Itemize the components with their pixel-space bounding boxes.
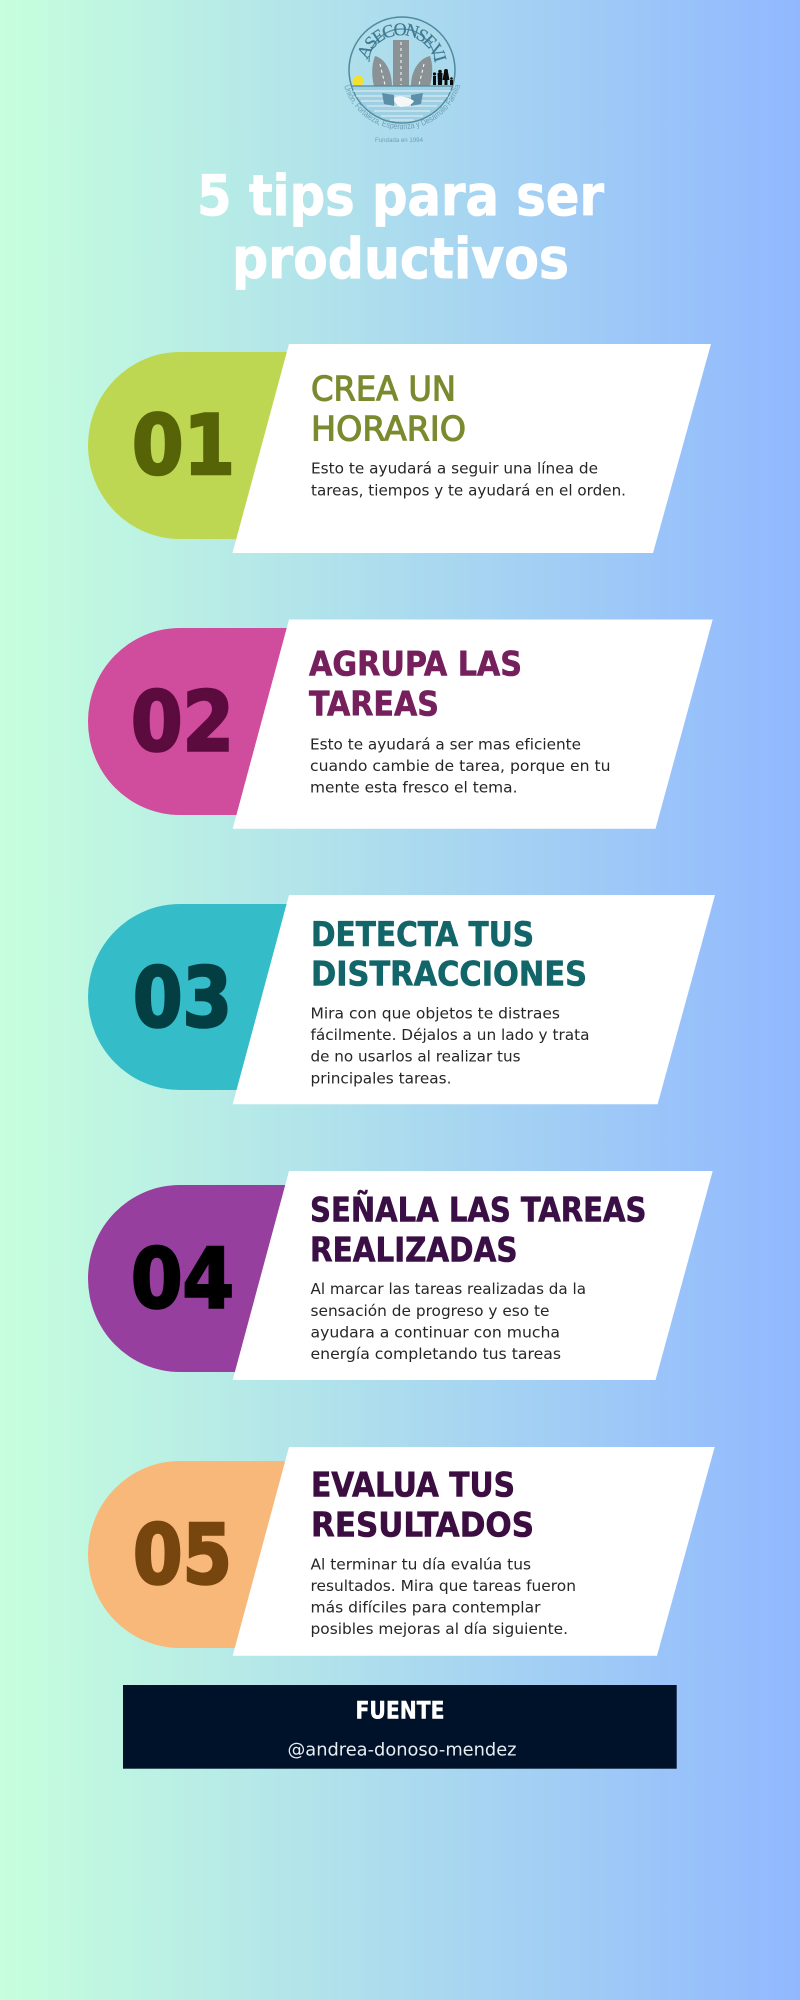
icon: family — [433, 69, 453, 85]
title: productivos — [232, 227, 569, 292]
heading 05: RESULTADOS — [311, 1505, 534, 1545]
number badge 05 — [88, 1461, 295, 1648]
body 02: mente esta fresco el tema. — [310, 778, 518, 796]
heading 03: DETECTA TUS — [311, 915, 534, 955]
heading 01: HORARIO — [311, 410, 466, 450]
number badge 04 — [88, 1185, 295, 1372]
logo: ASECONSEVI — [344, 16, 460, 144]
body 05: posibles mejoras al día siguiente. — [310, 1620, 568, 1638]
footer: fuente — [123, 1685, 677, 1769]
body 04: energía completando tus tareas — [310, 1345, 561, 1363]
heading 04: REALIZADAS — [310, 1230, 518, 1270]
heading 02: AGRUPA LAS — [309, 645, 522, 685]
body 05 — [310, 1555, 576, 1638]
card 02 — [233, 620, 713, 829]
heading 01: CREA UN — [311, 370, 456, 410]
number badge 02: 02 — [131, 674, 234, 771]
body 04: Al marcar las tareas realizadas da la — [310, 1280, 586, 1298]
title — [197, 164, 604, 292]
heading 05 — [311, 1465, 534, 1545]
heading 02 — [309, 645, 522, 725]
panel: tip 04 — [88, 1171, 713, 1380]
body 01: Esto te ayudará a seguir una línea de — [311, 459, 598, 477]
icon: roads — [372, 40, 432, 86]
number badge 01: 01 — [132, 397, 235, 494]
body 05: más difíciles para contemplar — [310, 1599, 541, 1617]
icon: handshake — [382, 93, 423, 107]
body 04 — [310, 1280, 586, 1363]
heading 05: EVALUA TUS — [311, 1465, 515, 1505]
heading 02: TAREAS — [309, 685, 439, 725]
body 03 — [310, 1004, 590, 1087]
logo founded note: Fundada en 1994 — [375, 137, 423, 144]
body 04: sensación de progreso y eso te — [310, 1302, 550, 1320]
number badge 04: 04 — [131, 1230, 234, 1327]
body 03: fácilmente. Déjalos a un lado y trata — [310, 1026, 590, 1044]
heading 03 — [311, 915, 587, 995]
number badge 05: 05 — [133, 1506, 232, 1603]
card 01 — [232, 344, 711, 553]
footer heading: FUENTE — [356, 1696, 444, 1724]
panel: tip 03 — [88, 895, 715, 1104]
body 05: resultados. Mira que tareas fueron — [310, 1577, 576, 1595]
body 01 — [311, 459, 626, 500]
heading 04: SEÑALA LAS TAREAS — [310, 1189, 646, 1230]
body 03: principales tareas. — [310, 1069, 452, 1087]
body 05: Al terminar tu día evalúa tus — [310, 1555, 531, 1573]
footer handle: @andrea-donoso-mendez — [288, 1740, 516, 1761]
number badge 03 — [88, 904, 295, 1090]
logo name: ASECONSEVI — [358, 23, 447, 63]
card 03 — [233, 895, 715, 1104]
number badge 01 — [88, 352, 295, 539]
panel: tip 02 — [88, 620, 713, 829]
heading 01 — [311, 370, 466, 450]
card 05 — [233, 1447, 715, 1656]
body 02: cuando cambie de tarea, porque en tu — [310, 757, 610, 775]
number badge 02 — [88, 628, 295, 815]
card 04 — [233, 1171, 713, 1380]
body 02 — [310, 735, 610, 796]
body 04: ayudara a continuar con mucha — [310, 1323, 560, 1341]
bridge bricks — [352, 86, 452, 123]
heading 03: DISTRACCIONES — [311, 955, 587, 995]
body 03: de no usarlos al realizar tus — [310, 1048, 520, 1066]
title: 5 tips para ser — [197, 164, 604, 229]
body 03: Mira con que objetos te distraes — [310, 1004, 560, 1022]
number badge 03: 03 — [133, 950, 232, 1047]
body 02: Esto te ayudará a ser mas eficiente — [310, 735, 581, 753]
body 01: tareas, tiempos y te ayudará en el orden. — [311, 482, 626, 500]
panel: tip 05 — [88, 1447, 715, 1656]
icon: sun — [352, 76, 364, 86]
panel: tip 01 — [88, 344, 711, 553]
heading 04 — [310, 1189, 646, 1270]
